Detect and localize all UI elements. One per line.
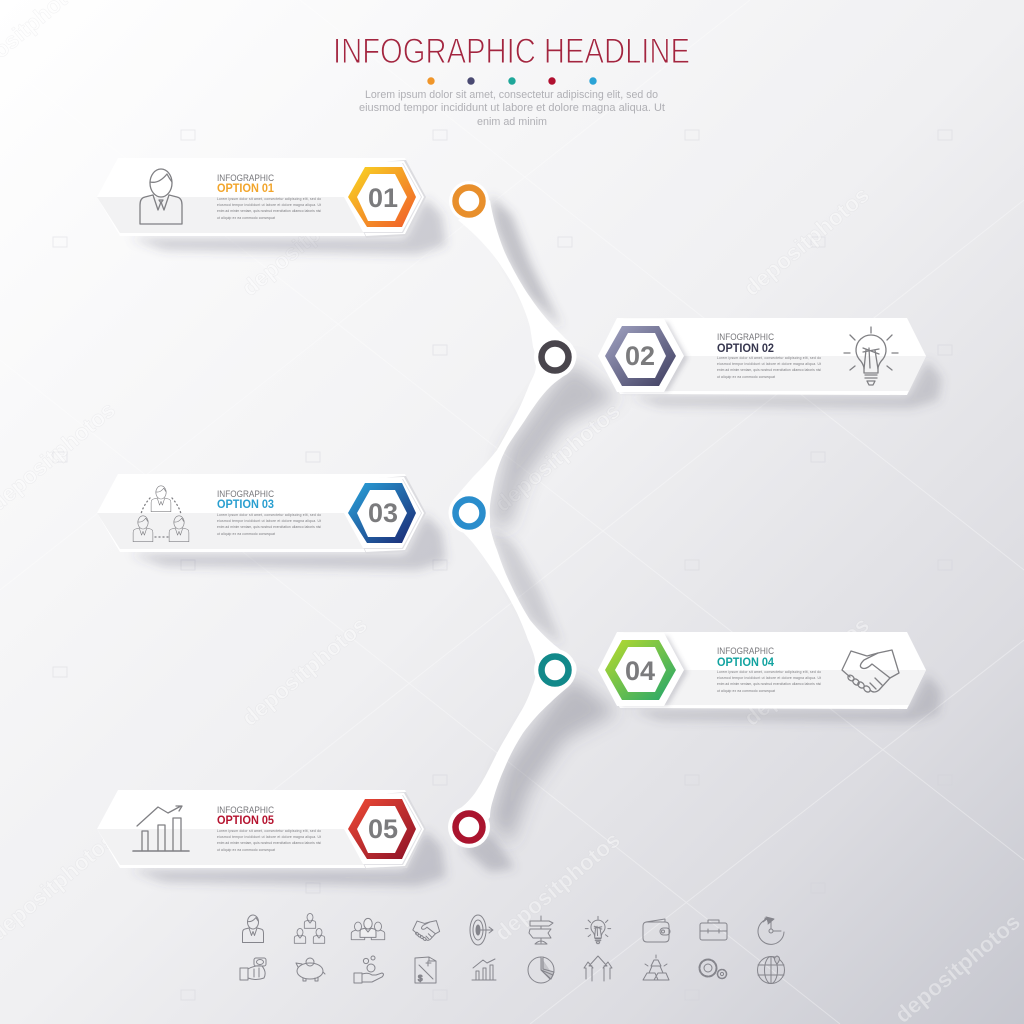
option 03 text: OPTION 03 (217, 499, 274, 511)
option 03 text: Lorem ipsum dolor sit amet, consectetur adipiscing elit, sed do (217, 513, 321, 517)
icon: pie chart (528, 957, 554, 983)
option 05 text: Lorem ipsum dolor sit amet, consectetur adipiscing elit, sed do (217, 829, 321, 833)
hexagon 05 (348, 799, 416, 859)
option 04 text: INFOGRAPHIC (717, 646, 774, 657)
option 05 text: eiusmod tempor incididunt ut labore et dolore magna aliqua. Ut (217, 835, 321, 839)
option 03 text: INFOGRAPHIC (217, 489, 274, 500)
watermark pattern: depositphotos (237, 182, 372, 301)
subtitle: Lorem ipsum dolor sit amet, consectetur adipiscing elit, sed do (365, 89, 658, 101)
option 03 text (217, 489, 321, 536)
icon: team network (133, 486, 189, 542)
icon: wallet (643, 919, 670, 942)
icon: target (470, 915, 493, 945)
hexagon 04 (605, 640, 676, 700)
icon: hand with coins (354, 956, 384, 983)
ring 03 (456, 500, 482, 526)
watermark pattern: depositphotos (490, 398, 625, 517)
connector path (448, 181, 577, 848)
watermark pattern: depositphotos (237, 612, 372, 731)
panel: option 03 (97, 474, 446, 570)
option 05 text: INFOGRAPHIC (217, 805, 274, 816)
option 02 text (717, 332, 821, 379)
number 01: 01 (368, 183, 398, 213)
option 05 text: enim ad minim veniam, quis nostrud exercitation ullamco laboris nisi (217, 841, 321, 845)
icon: handshake small (413, 921, 440, 941)
icon: clock arrow (758, 917, 784, 944)
icon row 1 (242, 913, 784, 945)
title: INFOGRAPHIC HEADLINE (333, 32, 690, 71)
option 04 text: enim ad minim veniam, quis nostrud exercitation ullamco laboris nisi (717, 682, 821, 686)
option 01 text: ut aliquip ex ea commodo consequat (217, 216, 275, 220)
icon: gears (700, 960, 726, 978)
subtitle: eiusmod tempor incididunt ut labore et dolore magna aliqua. Ut (359, 102, 665, 114)
icon: light bulb (844, 327, 898, 385)
ring 04 (542, 656, 568, 684)
number 03: 03 (368, 498, 398, 528)
option 04 text: ut aliquip ex ea commodo consequat (717, 689, 775, 693)
option 05 text: OPTION 05 (217, 815, 275, 827)
document dollar sign: $ (418, 974, 423, 983)
icon row 2 (240, 955, 784, 984)
colour dots (427, 77, 597, 85)
option 02 text: INFOGRAPHIC (717, 332, 774, 343)
ring 05 (456, 814, 482, 840)
option 02 text: Lorem ipsum dolor sit amet, consectetur adipiscing elit, sed do (717, 356, 821, 360)
icon: fist with money (240, 958, 266, 980)
icon: globe (758, 956, 784, 984)
option 04 text: Lorem ipsum dolor sit amet, consectetur adipiscing elit, sed do (717, 670, 821, 674)
option 04 text (717, 646, 821, 693)
option 04 text: eiusmod tempor incididunt ut labore et dolore magna aliqua. Ut (717, 676, 821, 680)
option 01 text: eiusmod tempor incididunt ut labore et dolore magna aliqua. Ut (217, 203, 321, 207)
icon: chart small (472, 959, 496, 980)
ring 01 (456, 188, 482, 214)
option 04 text: OPTION 04 (717, 657, 775, 669)
icon: bulb small (585, 916, 611, 944)
option 02 text: ut aliquip ex ea commodo consequat (717, 375, 775, 379)
option 01 text: OPTION 01 (217, 183, 275, 195)
watermark pattern: depositphotos (739, 182, 874, 301)
number 05: 05 (368, 814, 398, 844)
panel: option 05 (97, 790, 446, 886)
option 01 text: Lorem ipsum dolor sit amet, consectetur adipiscing elit, sed do (217, 197, 321, 201)
subtitle: enim ad minim (477, 116, 547, 128)
icon: document (415, 957, 436, 983)
icon: signpost (529, 916, 553, 944)
option 02 text: OPTION 02 (717, 343, 774, 355)
subtitle (359, 89, 665, 128)
option 03 text: ut aliquip ex ea commodo consequat (217, 532, 275, 536)
ring 02 (542, 344, 568, 370)
option 02 text: enim ad minim veniam, quis nostrud exercitation ullamco laboris nisi (717, 368, 821, 372)
icon: growth chart (133, 806, 189, 851)
icon: group (351, 918, 385, 940)
option 05 text: ut aliquip ex ea commodo consequat (217, 848, 275, 852)
option 02 text: eiusmod tempor incididunt ut labore et dolore magna aliqua. Ut (717, 362, 821, 366)
panel: option 04 (598, 632, 942, 722)
option 03 text: eiusmod tempor incididunt ut labore et dolore magna aliqua. Ut (217, 519, 321, 523)
icon: growth arrows (584, 956, 612, 981)
icon: gold bars (643, 955, 669, 980)
option 05 text (217, 805, 321, 852)
option 01 text (217, 173, 321, 220)
panel: option 01 (97, 158, 446, 254)
hexagon 03 (348, 483, 416, 543)
icon: person (242, 915, 264, 942)
option 01 text: INFOGRAPHIC (217, 173, 274, 184)
watermark pattern: depositphotos (739, 612, 874, 731)
icon: businessman (140, 169, 182, 224)
icon: piggy bank (296, 958, 325, 981)
panel: option 02 (598, 318, 942, 408)
connector shadows (462, 195, 618, 872)
icon: handshake (842, 650, 899, 693)
option 01 text: enim ad minim veniam, quis nostrud exercitation ullamco laboris nisi (217, 209, 321, 213)
number 04: 04 (625, 656, 655, 686)
number 02: 02 (625, 341, 655, 371)
icon: briefcase (700, 920, 727, 940)
hexagon 02 (605, 326, 676, 386)
hexagon 01 (348, 167, 416, 227)
icon: team (294, 913, 325, 943)
watermark pattern: depositphotos (490, 827, 625, 946)
option 03 text: enim ad minim veniam, quis nostrud exercitation ullamco laboris nisi (217, 525, 321, 529)
